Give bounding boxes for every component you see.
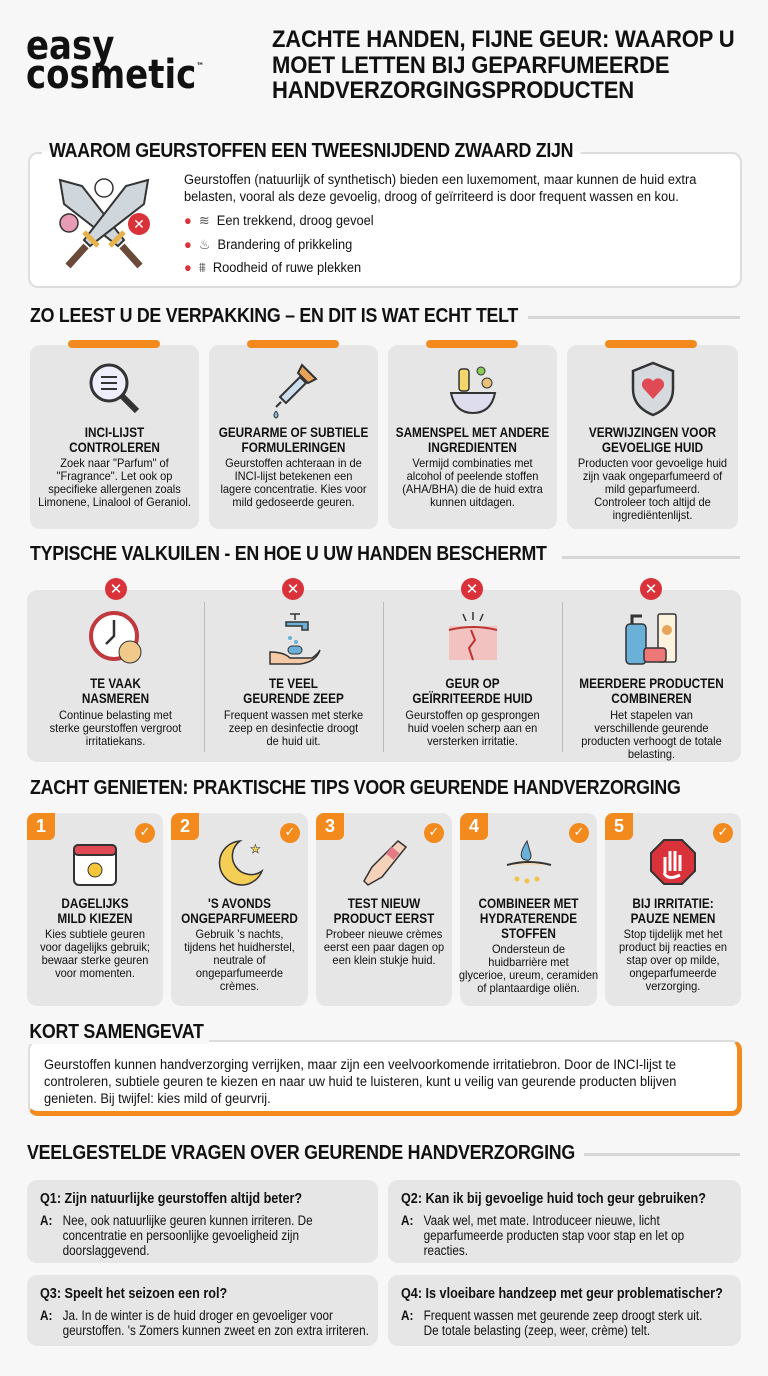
icon: dropper (274, 363, 318, 418)
faq Q1: Q1: Zijn natuurlijke geurstoffen altijd beter? (40, 1191, 302, 1207)
card: geurarme (209, 345, 378, 529)
icon: crossed swords (58, 178, 150, 268)
faq Q4: De totale belasting (zeep, weer, crème) telt. (424, 1323, 650, 1338)
card: INCI: specifieke allergenen zoals (48, 482, 181, 496)
pitfall: combineren: Het stapelen van (610, 708, 693, 722)
tip 1: voor momenten. (55, 966, 135, 980)
icon: magnifier (90, 364, 140, 414)
card: geurarme: lagere concentratie. Kies voor (220, 482, 367, 496)
tip 3: 3 (325, 816, 335, 836)
tip 2: neutrale of (213, 953, 266, 967)
text: summary: Geurstoffen kunnen handverzorging verrijken, maar zijn een veelvoorkomende irritatiebron. Door de INCI-lijst te (44, 1057, 676, 1072)
tip 1: ✓ (140, 825, 150, 840)
tip 4: Ondersteun de (492, 942, 565, 956)
tip 1: MILD KIEZEN (57, 910, 133, 926)
pitfall: zeep: zeep en desinfectie droogt (229, 721, 358, 735)
icon: arm patch (363, 840, 407, 886)
tip 3: PRODUCT EERST (334, 910, 434, 926)
text: intro (184, 172, 696, 204)
pitfall: zeep: GEURENDE ZEEP (243, 690, 344, 706)
card: geurarme: Geurstoffen achteraan in de (225, 456, 362, 470)
title: MOET LETTEN BIJ GEPARFUMEERDE (272, 52, 669, 78)
pitfall: combineren: MEERDERE PRODUCTEN (579, 675, 724, 691)
text: ✕ (645, 580, 657, 598)
faq Q1 (27, 1180, 378, 1263)
pitfall: geïrriteerde huid: GEÏRRITEERDE HUID (412, 690, 533, 706)
card: INCI: Zoek naar "Parfum" of (60, 456, 169, 470)
faq Q1: doorslaggevend. (63, 1243, 149, 1258)
faq Q2: A: (401, 1213, 413, 1228)
pitfall: te vaak: TE VAAK (90, 675, 141, 691)
heading: kort samengevat: KORT SAMENGEVAT (29, 1021, 204, 1043)
card: INCI (30, 345, 199, 529)
text: summary: controleren, subtiele geuren te kiezen en naar uw huid te luisteren, kunt u veilig van geurende producten blijven (44, 1074, 676, 1089)
tip 3: TEST NIEUW (348, 895, 420, 911)
faq Q4 (388, 1275, 741, 1346)
tip 3: een klein stukje huid. (332, 953, 436, 967)
tip 3: eerst een paar dagen op (324, 940, 444, 954)
card: INCI: Limonene, Linalool of Geraniol. (38, 495, 191, 509)
card: samenspel: Vermijd combinaties met (412, 456, 533, 470)
card: geurarme: INCI-lijst betekenen een (235, 469, 352, 483)
card: samenspel: alcohol of peelende stoffen (407, 469, 538, 483)
card: INCI: "Fragrance". Let ook op (57, 469, 172, 483)
pitfall: combineren: verschillende geurende (594, 721, 709, 735)
tip 1: bewaar sterke geuren (42, 953, 148, 967)
logo: cosmetic™ (26, 52, 204, 98)
tip 3: Probeer nieuwe crèmes (326, 927, 442, 941)
faq Q2: geparfumeerde producten stap voor stap en let op (424, 1228, 684, 1243)
faq Q3: Ja. In de winter is de huid droger en gevoeliger voor (63, 1308, 333, 1323)
logo (26, 23, 204, 98)
tip 1 (27, 813, 163, 1006)
icon: stop hand (650, 839, 696, 885)
pitfall: combineren: belasting. (628, 747, 675, 761)
icon: bowl (450, 366, 496, 414)
pitfall: geïrriteerde huid: huid voelen scherp aan en (408, 721, 537, 735)
tip 4: COMBINEER MET (479, 895, 578, 911)
bullet list: ● ♨ Brandering of prikkeling (184, 236, 352, 252)
icon: products (625, 613, 677, 665)
pitfall: te vaak (50, 578, 182, 748)
panel: two-edged sword (28, 152, 742, 288)
pitfall: te vaak: NASMEREN (82, 690, 149, 706)
tip 4 (460, 813, 597, 1006)
pitfall: geïrriteerde huid: Geurstoffen op gesprongen (405, 708, 540, 722)
tip 1: DAGELIJKS (61, 895, 129, 911)
tip 4: glycerioe, ureum, ceramiden (459, 968, 598, 982)
faq Q1: A: (40, 1213, 52, 1228)
pitfall: zeep (224, 578, 363, 748)
faq Q1: concentratie en persoonlijke gevoeligheid zijn (63, 1228, 299, 1243)
card: gevoelige huid: GEVOELIGE HUID (602, 439, 703, 455)
faq Q1: Nee, ook natuurlijke geuren kunnen irriteren. De (63, 1213, 313, 1228)
tip 5: verzorging. (646, 979, 700, 993)
tip 2: ongeparfumeerde (196, 966, 283, 980)
tip 2: ONGEPARFUMEERD (181, 910, 298, 926)
pitfall: combineren: producten verhoogt de totale (581, 734, 722, 748)
text: intro: belasten, vooral als deze gevoelig, droog of geïrriteerd is door frequent wassen en kou. (184, 189, 679, 204)
text: summary (44, 1057, 676, 1106)
tip 1: voor dagelijks gebruik; (40, 940, 150, 954)
text: ✕ (287, 580, 299, 598)
tip 4: ✓ (574, 825, 584, 840)
pitfall: zeep: Frequent wassen met sterke (224, 708, 363, 722)
icon: clock (89, 611, 142, 664)
card: samenspel: kunnen uitdagen. (430, 495, 515, 509)
card: geurarme: FORMULERINGEN (242, 439, 345, 455)
tip 5: PAUZE NEMEN (631, 910, 715, 926)
heading: faq: VEELGESTELDE VRAGEN OVER GEURENDE HANDVERZORGING (27, 1142, 575, 1164)
card: geurarme: mild gedoseerde geuren. (232, 495, 355, 509)
text: intro: Geurstoffen (natuurlijk of synthetisch) bieden een luxemoment, maar kunnen de huid extra (184, 172, 696, 187)
tip 5: ✓ (718, 825, 728, 840)
heading: tips: ZACHT GENIETEN: PRAKTISCHE TIPS VOOR GEURENDE HANDVERZORGING (30, 777, 681, 799)
tip 2: tijdens het huidherstel, (184, 940, 295, 954)
tip 4: HYDRATERENDE (480, 910, 577, 926)
tip 1: 1 (36, 816, 46, 836)
faq Q2: Vaak wel, met mate. Introduceer nieuwe, licht (424, 1213, 660, 1228)
pitfall: geïrriteerde huid: versterken irritatie. (427, 734, 518, 748)
tip 4: huidbarrière met (488, 955, 569, 969)
logo: easy (26, 23, 114, 69)
text: summary: genieten. Bij twijfel: kies mild of geurvrij. (44, 1091, 271, 1106)
heading: verpakking: ZO LEEST U DE VERPAKKING – EN DIT IS WAT ECHT TELT (30, 305, 518, 327)
tip 5: stap over op milde, (626, 953, 720, 967)
faq Q2: reacties. (424, 1243, 468, 1258)
pitfall: zeep: TE VEEL (269, 675, 318, 691)
card: gevoelige huid: Controleer toch altijd de (594, 495, 711, 509)
card: samenspel: SAMENSPEL MET ANDERE (396, 424, 549, 440)
card: gevoelige huid: zijn vaak ongeparfumeerd of (583, 469, 722, 483)
tip 4: of plantaardige oliën. (477, 981, 580, 995)
faq Q2: Q2: Kan ik bij gevoelige huid toch geur gebruiken? (401, 1191, 706, 1207)
icon: shield heart (632, 362, 674, 416)
text: ✕ (110, 580, 122, 598)
faq Q3 (27, 1275, 378, 1346)
card: samenspel: INGREDIENTEN (428, 439, 517, 455)
card: samenspel (388, 345, 557, 529)
heading: valkuilen: TYPISCHE VALKUILEN - EN HOE U UW HANDEN BESCHERMT (30, 543, 547, 565)
faq Q3: Q3: Speelt het seizoen een rol? (40, 1286, 227, 1302)
bullet list: ● ⩩ Roodheid of ruwe plekken (184, 260, 361, 275)
card: gevoelige huid (567, 345, 738, 529)
faq Q4: A: (401, 1308, 413, 1323)
icon: calendar sun (73, 844, 117, 886)
tip 2 (171, 813, 308, 1006)
tip 5: 5 (614, 816, 624, 836)
icon: water drops skin (506, 840, 552, 884)
tip 2: ✓ (285, 825, 295, 840)
tip 4: 4 (469, 816, 479, 836)
heading: tweesnijdend zwaard: WAAROM GEURSTOFFEN EEN TWEESNIJDEND ZWAARD ZIJN (49, 140, 573, 162)
tip 2: crèmes. (220, 979, 259, 993)
pitfall: geïrriteerde huid (405, 578, 540, 748)
bullet list (184, 213, 374, 275)
text: ✕ (466, 580, 478, 598)
tip 2: 2 (180, 816, 190, 836)
card: gevoelige huid: VERWIJZINGEN VOOR (589, 424, 716, 440)
faq Q3: A: (40, 1308, 52, 1323)
summary box (28, 1040, 742, 1116)
tip 5: product bij reacties en (619, 940, 727, 954)
tip 5 (605, 813, 741, 1006)
icon: crossed swords: ✕ (133, 217, 145, 233)
tip 3 (316, 813, 452, 1006)
bullet list: ● ≋ Een trekkend, droog gevoel (184, 213, 374, 228)
faq Q3: geurstoffen. 's Zomers kunnen zweet en zon extra irriteren. (63, 1323, 369, 1338)
tip 2: Gebruik 's nachts, (195, 927, 284, 941)
icon: moon (218, 840, 264, 886)
tip 5: ongeparfumeerde (629, 966, 717, 980)
icon: cracked skin (448, 612, 498, 660)
title: HANDVERZORGINGSPRODUCTEN (272, 77, 634, 104)
tip 5: BIJ IRRITATIE: (632, 895, 714, 911)
icon: faucet hand (269, 613, 321, 665)
pitfall: zeep: de huid uit. (266, 734, 321, 748)
tip 4: STOFFEN (501, 925, 556, 941)
pitfall: combineren: COMBINEREN (611, 690, 692, 706)
card: INCI: INCI-LIJST (85, 424, 144, 440)
title (272, 26, 735, 104)
card: gevoelige huid: mild geparfumeerd. (605, 482, 700, 496)
panel: valkuilen (27, 590, 741, 762)
card: geurarme: GEURARME OF SUBTIELE (219, 424, 368, 440)
title: ZACHTE HANDEN, FIJNE GEUR: WAAROP U (272, 26, 735, 53)
tip 1: Kies subtiele geuren (45, 927, 145, 941)
faq Q4: Q4: Is vloeibare handzeep met geur problematischer? (401, 1286, 723, 1302)
pitfall: te vaak: irritatiekans. (86, 734, 145, 748)
tip 2: 'S AVONDS (208, 895, 271, 911)
card: gevoelige huid: Producten voor gevoelige huid (578, 456, 727, 470)
tip 5: Stop tijdelijk met het (624, 927, 722, 941)
card: samenspel: (AHA/BHA) die de huid extra (402, 482, 543, 496)
tip 3: ✓ (429, 825, 439, 840)
pitfall: combineren (579, 578, 724, 761)
pitfall: te vaak: Continue belasting met (59, 708, 172, 722)
faq Q4: Frequent wassen met geurende zeep droogt sterk uit. (424, 1308, 702, 1323)
pitfall: te vaak: sterke geurstoffen vergroot (50, 721, 181, 735)
card: gevoelige huid: ingrediëntenlijst. (613, 508, 692, 522)
icon: moon: ★ (250, 842, 260, 856)
faq Q2 (388, 1180, 741, 1263)
pitfall: geïrriteerde huid: GEUR OP (445, 675, 500, 691)
card: INCI: CONTROLEREN (69, 439, 160, 455)
